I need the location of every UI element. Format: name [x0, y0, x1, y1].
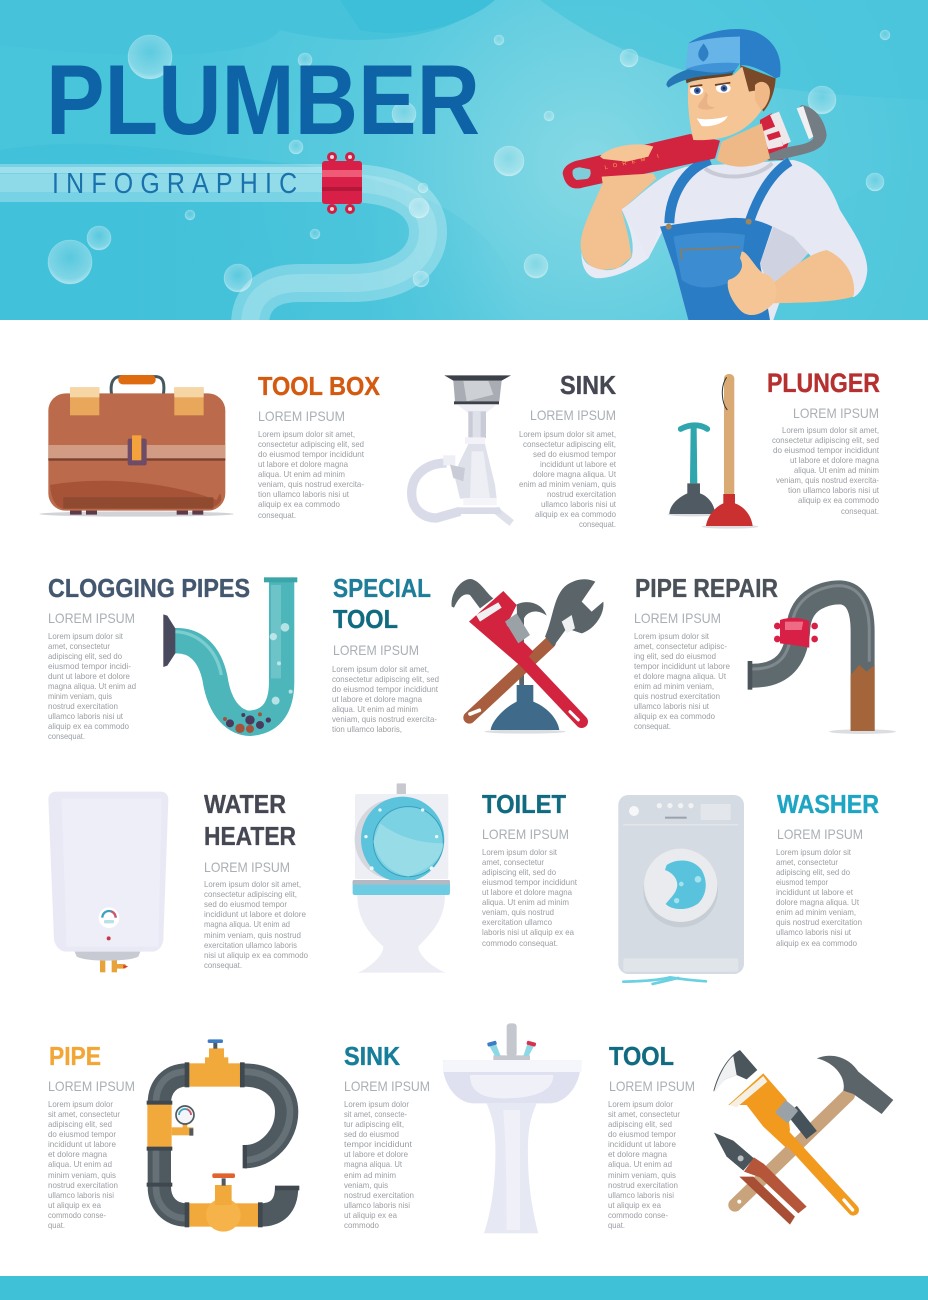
body text: aliquip ex ea commodo [776, 938, 857, 948]
heading: PLUNGER [767, 368, 880, 398]
body text: adipiscing elit, sed [48, 1119, 112, 1129]
body text: aliquip ex ea commodo [535, 509, 616, 519]
body text: tempor incididunt ut labore [634, 661, 730, 671]
subheading: LOREM IPSUM [793, 405, 879, 421]
heading: PIPE [49, 1041, 101, 1071]
footer bar [0, 1276, 928, 1300]
body text [608, 1099, 680, 1230]
body text: ut labore et dolore magna [258, 459, 348, 469]
subheading: LOREM IPSUM [634, 610, 721, 626]
body text: consequat. [841, 506, 879, 516]
overalls [660, 160, 790, 320]
body text: sit amet, consecte- [344, 1109, 407, 1119]
body text: aliquip ex ea commodo [634, 711, 715, 721]
body text: commodo [344, 1220, 379, 1230]
body text: magna aliqua. Ut enim ad [204, 919, 290, 929]
body text: enim ad minim [344, 1170, 396, 1180]
body text: commodo conse- [48, 1210, 106, 1220]
body text: incididunt ut labore et [540, 459, 617, 469]
body text: ullamco laboris nisi [608, 1190, 674, 1200]
body text: tempor incididunt [344, 1139, 413, 1149]
body text [48, 1099, 120, 1230]
body text: et dolore magna [48, 1149, 107, 1159]
body text: quis nostrud exercitation [776, 917, 862, 927]
body text: et dolore magna [608, 1149, 667, 1159]
body text [634, 631, 730, 731]
body text: aliqua. Ut enim ad [608, 1159, 672, 1169]
body text: ullamco laboris nisi [48, 1190, 114, 1200]
subheading: LOREM IPSUM [48, 1078, 135, 1094]
icon: tool box [39, 375, 234, 517]
body text: aliquip ex ea commodo [258, 499, 340, 509]
body text [204, 879, 308, 970]
subheading: LOREM IPSUM [344, 1078, 430, 1094]
icon: washing machine [618, 795, 744, 984]
panel: special tool [332, 573, 603, 734]
shirt [622, 160, 867, 320]
panel: water heater [48, 789, 308, 972]
body text: incididunt ut labore [48, 1139, 116, 1149]
body text: consequat. [204, 960, 242, 970]
body text: amet, consectetur adipisc- [634, 641, 727, 651]
heading: HEATER [204, 821, 296, 851]
subheading: LOREM IPSUM [258, 408, 345, 424]
body text: veniam, quis nostrud exercita- [776, 475, 879, 485]
body text: ullamco laboris nisi ut [776, 927, 852, 937]
body text: consectetur adipiscing elit, sed [258, 439, 364, 449]
heading: SINK [560, 370, 616, 400]
heading: WATER [204, 789, 286, 819]
body text: ut labore et dolore magna [332, 694, 422, 704]
body text: amet, consectetur [48, 641, 110, 651]
body text: laboris nisi ut aliquip ex ea [482, 927, 574, 937]
body text: ut labore et dolore magna [482, 887, 572, 897]
heading: TOOL BOX [258, 371, 381, 401]
body text: eiusmod tempor incidi- [48, 661, 131, 671]
body text: magna aliqua. Ut [344, 1159, 403, 1169]
body text: minim veniam, quis [608, 1170, 676, 1180]
body text: tion ullamco laboris nisi ut [258, 489, 350, 499]
body text: minim veniam, quis [48, 1170, 116, 1180]
body text: amet, consectetur [482, 857, 544, 867]
body text: ut aliquip ex ea [344, 1210, 397, 1220]
body text: consequat. [634, 721, 671, 731]
body text: enim ad minim veniam, [776, 907, 856, 917]
body text: incididunt ut labore [608, 1139, 676, 1149]
icon: water heater [48, 792, 168, 972]
body text: quis nostrud exercitation [634, 691, 720, 701]
cap [666, 29, 781, 88]
body text: commodo conse- [608, 1210, 668, 1220]
body text: sed do eiusmod tempor [204, 899, 287, 909]
bubbles [48, 30, 890, 292]
icon: crossed wrenches and plunger [452, 579, 603, 734]
body text: sit amet, consectetur [48, 1109, 120, 1119]
wrench [563, 105, 827, 188]
body text: quat. [48, 1220, 65, 1230]
body text: veniam, quis nostrud exercita- [332, 714, 437, 724]
body text: Lorem ipsum dolor [344, 1099, 409, 1109]
heading [204, 789, 296, 851]
panel: clogging pipes [48, 573, 297, 741]
title: plumber: PLUMBER [46, 44, 480, 155]
heading: TOILET [482, 789, 566, 819]
body text: nostrud exercitation [608, 1180, 678, 1190]
body text: sed do eiusmod [344, 1129, 399, 1139]
body text: consectetur adipiscing elit, [204, 889, 297, 899]
heading: TOOL [609, 1041, 674, 1071]
body text: nostrud exercitation [547, 489, 616, 499]
icon: clogged pipe [163, 577, 297, 733]
body text: tion ullamco laboris, [332, 724, 402, 734]
body text: nostrud exercitation [48, 701, 118, 711]
heading: PIPE REPAIR [635, 573, 778, 603]
icon: sink trap [412, 375, 512, 523]
panel: tool [608, 1041, 893, 1230]
body text [519, 429, 617, 529]
body text: incididunt ut labore et dolore [204, 909, 306, 919]
head and neck [666, 29, 781, 177]
forearm and thumb-up hand [773, 250, 854, 303]
body text: do eiusmod tempor incididunt [332, 684, 439, 694]
subheading: LOREM IPSUM [777, 826, 863, 842]
body text: amet, consectetur [776, 857, 838, 867]
body text: et dolore magna aliqua. Ut [634, 671, 727, 681]
body text: dolore magna aliqua. Ut [533, 469, 617, 479]
body text: minim veniam, quis nostrud [204, 930, 301, 940]
body text: ullamco laboris nisi ut [48, 711, 124, 721]
panel: tool box [39, 371, 381, 520]
body text: veniam, quis nostrud exercita- [258, 479, 364, 489]
left sleeve [582, 183, 667, 278]
subheading: LOREM IPSUM [609, 1078, 695, 1094]
body text: aliqua. Ut enim ad [48, 1159, 112, 1169]
body text: tur adipiscing elit, [344, 1119, 404, 1129]
body text [776, 847, 862, 948]
body text: consequat. [579, 519, 616, 529]
icon: pipe clamp [322, 152, 362, 214]
panel: pipe repair [634, 573, 896, 734]
wrench: LOREM I [604, 153, 665, 171]
body text: Lorem ipsum dolor sit [48, 631, 124, 641]
body text: consequat. [48, 731, 85, 741]
body text: dunt ut labore et dolore [48, 671, 130, 681]
body text: quat. [608, 1220, 625, 1230]
body text [258, 429, 365, 520]
body text: aliquip ex ea commodo [798, 495, 879, 505]
heading: TOOL [333, 604, 398, 634]
subheading: LOREM IPSUM [48, 610, 135, 626]
body text: sit amet, consectetur [608, 1109, 680, 1119]
body text: ut labore et dolore magna [790, 455, 879, 465]
body text: Lorem ipsum dolor sit [482, 847, 558, 857]
body text: ut aliquip ex ea [608, 1200, 661, 1210]
panel: toilet [353, 783, 578, 973]
body text [772, 425, 880, 516]
body text: enim ad minim veniam, quis [519, 479, 616, 489]
body text: eiusmod tempor [776, 877, 828, 887]
body text: Lorem ipsum dolor [608, 1099, 673, 1109]
heading: SPECIAL [333, 573, 431, 603]
panel: washer [618, 789, 879, 984]
icon: repaired pipe [748, 586, 896, 734]
subheading: LOREM IPSUM [530, 407, 616, 423]
body text [482, 847, 578, 948]
body text: sed do eiusmod tempor [533, 449, 616, 459]
raised arm [581, 180, 655, 270]
body text: do eiusmod tempor incididunt [258, 449, 365, 459]
plumber character [563, 29, 867, 320]
body text: ullamco laboris nisi [344, 1200, 410, 1210]
body text: Lorem ipsum dolor sit amet, [332, 664, 429, 674]
body text: consectetur adipiscing elit, [523, 439, 616, 449]
glass pipe [0, 170, 428, 325]
header banner [0, 0, 928, 325]
icon: crossed hand tools [713, 1050, 893, 1225]
body text: tion ullamco laboris nisi ut [788, 485, 880, 495]
subheading: LOREM IPSUM [204, 859, 290, 875]
body text [332, 664, 439, 734]
body text [48, 631, 136, 741]
panel: plunger [668, 368, 880, 529]
body text: exercitation ullamco [482, 917, 552, 927]
panel: sink basin [344, 1023, 582, 1233]
body text: veniam, quis nostrud [482, 907, 554, 917]
body text: aliquip ex ea commodo [48, 721, 129, 731]
body text: adipiscing elit, sed do [48, 651, 122, 661]
body text: nisi ut aliquip ex ea commodo [204, 950, 308, 960]
subheading: LOREM IPSUM [482, 826, 569, 842]
body text: do eiusmod tempor [48, 1129, 116, 1139]
body text [344, 1099, 414, 1230]
body text: consequat. [258, 510, 296, 520]
body text: aliqua. Ut enim ad minim [482, 897, 569, 907]
icon: pedestal sink [443, 1023, 582, 1233]
body text: ut aliquip ex ea [48, 1200, 101, 1210]
body text: Lorem ipsum dolor sit amet, [782, 425, 879, 435]
body text: adipiscing elit, sed do [776, 867, 850, 877]
body text: Lorem ipsum dolor sit [634, 631, 710, 641]
subtitle: infographic: INFOGRAPHIC [52, 167, 297, 199]
body text: consectetur adipiscing elit, sed [332, 674, 439, 684]
body text: dolore magna aliqua. Ut [776, 897, 860, 907]
body text: Lorem ipsum dolor sit amet, [519, 429, 616, 439]
body text: Lorem ipsum dolor sit amet, [258, 429, 355, 439]
icon: plungers [668, 374, 758, 529]
panel: sink trap [412, 370, 617, 529]
body text: do eiusmod tempor incididunt [773, 445, 880, 455]
body text: nostrud exercitation [344, 1190, 414, 1200]
body text: Lorem ipsum dolor sit [776, 847, 852, 857]
icon: pipe system [147, 1039, 299, 1232]
body text: eiusmod tempor incididunt [482, 877, 578, 887]
heading: WASHER [777, 789, 879, 819]
body text: nostrud exercitation [48, 1180, 118, 1190]
heading [333, 573, 431, 634]
heading: CLOGGING PIPES [48, 573, 250, 603]
body text: ullamco laboris nisi ut [634, 701, 710, 711]
body text: adipiscing elit, sed do [482, 867, 556, 877]
icon: toilet [353, 783, 450, 973]
body text: Lorem ipsum dolor sit amet, [204, 879, 301, 889]
body text: aliqua. Ut enim ad minim [258, 469, 345, 479]
body text: ullamco laboris nisi ut [541, 499, 617, 509]
heading: SINK [344, 1041, 400, 1071]
body text: aliqua. Ut enim ad minim [332, 704, 418, 714]
body text: magna aliqua. Ut enim ad [48, 681, 136, 691]
body text: do eiusmod tempor [608, 1129, 676, 1139]
body text: adipiscing elit, sed [608, 1119, 672, 1129]
body text: enim ad minim veniam, [634, 681, 714, 691]
body text: exercitation ullamco laboris [204, 940, 297, 950]
panel: pipe [48, 1039, 299, 1232]
body text: incididunt ut labore et [776, 887, 854, 897]
body text: minim veniam, quis [48, 691, 112, 701]
body text: veniam, quis [344, 1180, 388, 1190]
body text: Lorem ipsum dolor [48, 1099, 113, 1109]
subheading: LOREM IPSUM [333, 642, 419, 658]
body text: ing elit, sed do eiusmod [634, 651, 716, 661]
body text: ut labore et dolore [344, 1149, 408, 1159]
body text: commodo consequat. [482, 938, 558, 948]
body text: aliqua. Ut enim ad minim [794, 465, 879, 475]
body text: consectetur adipiscing elit, sed [772, 435, 879, 445]
hand on wrench [600, 144, 653, 162]
